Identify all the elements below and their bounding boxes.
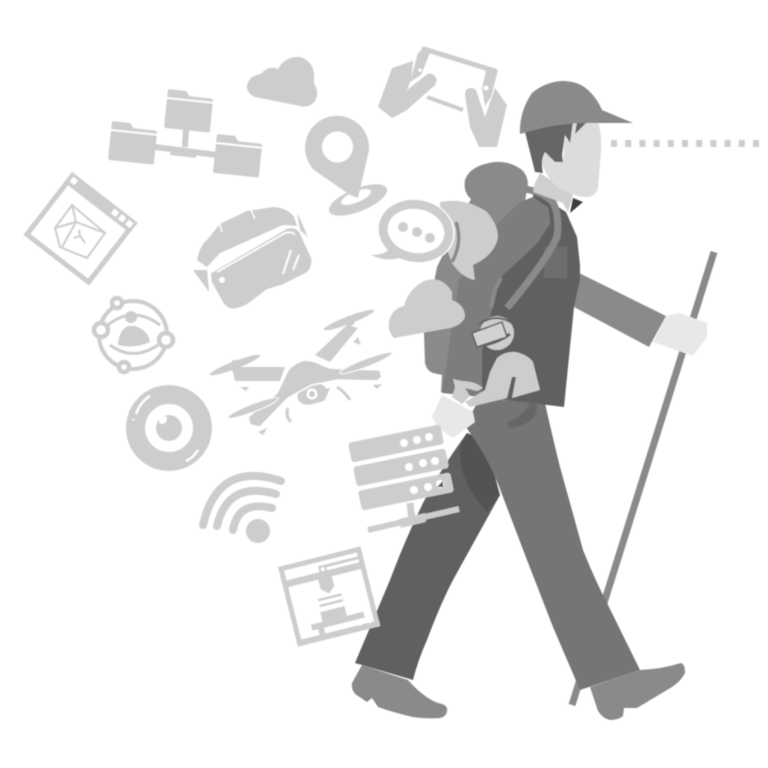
- cap: [520, 81, 633, 134]
- solid bubble: [440, 201, 498, 280]
- cube: [55, 205, 105, 258]
- icon: speech bubbles: [371, 193, 498, 280]
- hiker figure: [352, 81, 707, 720]
- icon: wifi signal: [203, 476, 281, 543]
- icon: folder network: [108, 89, 263, 178]
- icon: hands holding tablet: [378, 47, 507, 147]
- ring bubble: [371, 193, 460, 269]
- server bottom: [358, 472, 454, 511]
- icon: cloud on backpack: [389, 279, 465, 338]
- icon: camera lens: [126, 385, 212, 471]
- icon: 3D cube browser window: [25, 172, 138, 284]
- pin body: [305, 116, 369, 198]
- dotted line of sight: [611, 140, 761, 147]
- server top: [348, 424, 444, 463]
- figure head with goggles: [472, 316, 514, 350]
- back shoe: [352, 665, 447, 718]
- glove on pole: [653, 313, 707, 356]
- collar: [570, 198, 583, 213]
- backpack strap: [491, 188, 558, 308]
- neck: [533, 173, 573, 212]
- front leg: [465, 398, 640, 690]
- icon: VR headset: [193, 207, 312, 309]
- left folder: [108, 121, 158, 165]
- vest: [482, 191, 580, 407]
- server middle: [353, 448, 449, 487]
- small figure with VR goggles: [432, 316, 540, 438]
- pack gap arc: [452, 222, 459, 262]
- icon: 3D printer: [279, 549, 380, 647]
- icon: drone: [208, 307, 394, 435]
- face: [541, 122, 601, 197]
- center folder: [164, 89, 214, 133]
- icon: cloud top: [247, 57, 317, 106]
- backpack: [424, 162, 550, 397]
- back leg: [355, 433, 500, 680]
- icon: server stack: [348, 424, 459, 530]
- front shoe: [590, 663, 685, 720]
- right hand: [465, 88, 507, 147]
- left hand: [378, 61, 436, 118]
- forward arm: [574, 273, 666, 347]
- icon: map pin: [305, 116, 391, 222]
- pin base crescent: [325, 178, 391, 222]
- glove near waist: [432, 395, 475, 438]
- right folder: [213, 134, 263, 178]
- icon: trekking pole: [572, 252, 714, 705]
- figure body: [452, 352, 540, 407]
- hair: [525, 122, 587, 173]
- icon: person network globe: [94, 298, 173, 372]
